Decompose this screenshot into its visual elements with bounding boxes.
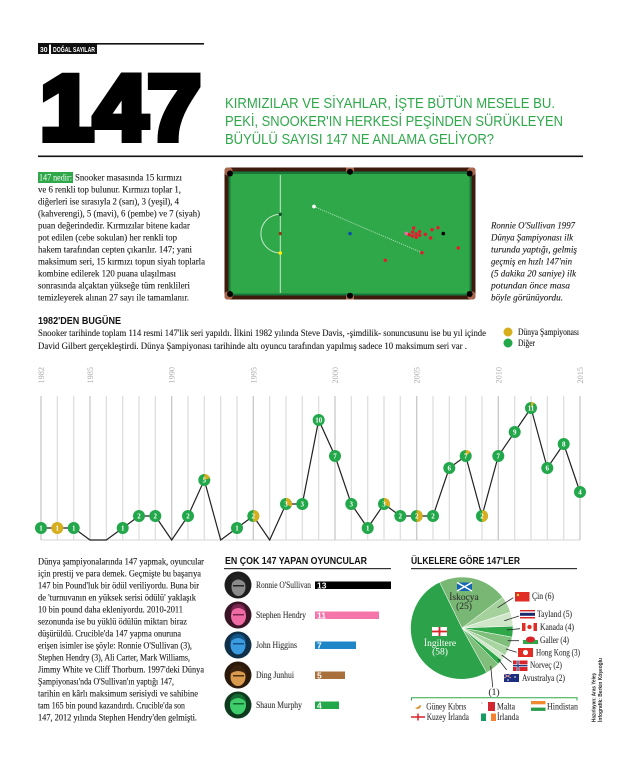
text block: prize money: için prestij ve para demek. Geçmişte bu başarıya: [38, 568, 201, 578]
player row: Ronnie O'Sullivan: [224, 572, 391, 598]
country label: Norway: Norveç (2): [530, 660, 562, 671]
country label: Thailand: Tayland (5): [537, 609, 572, 620]
text block: what is 147: kombine edilerek 120 puana ulaşılması: [38, 268, 176, 278]
pie label: Scotland: İskoçya: [449, 591, 480, 603]
snooker table diagram: [224, 168, 476, 300]
section tag: page number and section name: DOĞAL SAYILAR: [53, 45, 95, 54]
heading: green subtitle: PEKİ, SNOOKER'IN HERKESİ PEŞİNDEN SÜRÜKLEYEN: [225, 112, 563, 130]
text block: chart intro: Snooker tarihinde toplam 114 resmi 147'lik seri yapıldı. İlkini 1982 yılında Steve Davis, -şimdilik- sonuncusunu ise bu yıl içinde: [38, 328, 486, 338]
country label: Thailand: [520, 609, 572, 620]
player row: Stephen Hendry: Stephen Hendry: [256, 611, 306, 621]
line chart: 147s per year 1982-2015: 4: [578, 488, 582, 496]
text block: chart intro: [38, 328, 486, 351]
line chart: 147s per year 1982-2015: 2: [431, 512, 435, 520]
section tag: page number and section name: 30: [40, 45, 48, 54]
text block: what is 147: hakem tarafından cepten çıkarılır. 147; yani: [38, 244, 192, 254]
player row: John Higgins: John Higgins: [256, 641, 297, 651]
text block: prize money: Jimmy White ve Cliff Thorburn. 1997'deki Dünya: [38, 664, 204, 674]
line chart: 147s per year 1982-2015: 1985: [86, 367, 95, 384]
text block: prize money: sezonunda ise bu yüklü ödülün miktarı biraz: [38, 616, 187, 626]
line chart: 147s per year 1982-2015: 8: [562, 440, 566, 448]
player row: Stephen Hendry: 11: [317, 610, 326, 620]
line chart: 147s per year 1982-2015: 6: [448, 464, 452, 472]
text block: prize money: [38, 556, 204, 722]
bracket and legend: single-count countries: Kuzey İrlanda: [427, 711, 470, 723]
text block: prize money: 10 bin pound daha ekleniyordu. 2010-2011: [38, 604, 183, 614]
country label: Canada: [522, 622, 574, 633]
text block: what is 147: [38, 172, 205, 302]
section tag: page number and section name: [38, 43, 204, 54]
line chart: 147s per year 1982-2015: 7: [333, 452, 337, 460]
player row: Ding Junhui: 5: [317, 670, 322, 680]
country label: Wales: [523, 635, 569, 646]
text block: what is 147: diğerleri ise sırasıyla 2 (sarı), 3 (yeşil), 4: [38, 196, 179, 206]
heading: green subtitle: BÜYÜLÜ SAYISI 147 NE ANLAMA GELİYOR?: [225, 130, 494, 148]
caption: table description: Ronnie O'Sullivan 1997: [490, 220, 575, 230]
caption: table description: [490, 220, 577, 302]
player row: Ronnie O'Sullivan: Ronnie O'Sullivan: [256, 581, 311, 591]
country label: Australia: [504, 673, 565, 684]
line chart: 147s per year 1982-2015: 1982: [37, 367, 46, 384]
line chart: 147s per year 1982-2015: 7: [464, 452, 468, 460]
text block: prize money: Şampiyonası'nda O'Sullivan'ın yaptığı 147,: [38, 676, 174, 686]
line chart: 147s per year 1982-2015: 1990: [168, 367, 177, 384]
player row: Shaun Murphy: 4: [317, 700, 322, 710]
player row: Stephen Hendry: [224, 602, 379, 628]
text block: what is 147: pot edilen (cebe sokulan) her renkli top: [38, 232, 177, 242]
line chart: 147s per year 1982-2015: 9: [513, 428, 517, 436]
bracket and legend: single-count countries: Malta: [497, 702, 516, 712]
line chart: 147s per year 1982-2015: 3: [382, 500, 386, 508]
country label: Canada: Kanada (4): [540, 622, 574, 633]
text block: prize money: de 'turnuvanın en yüksek serisi ödülü' yaklaşık: [38, 592, 196, 602]
line chart: 147s per year 1982-2015: 1: [56, 524, 60, 532]
pie label: Scotland: (25): [456, 601, 472, 612]
text block: prize money: 147 bin Pound'luk bir ödül veriliyordu. Buna bir: [38, 580, 199, 590]
credits: rotated: [592, 658, 604, 722]
line chart: 147s per year 1982-2015: 2: [252, 512, 256, 520]
text block: prize money: tam 165 bin pound kazandırdı. Crucible'da son: [38, 700, 185, 710]
country label: China: [515, 591, 554, 602]
line chart: 147s per year 1982-2015: 2010: [494, 367, 503, 384]
text block: prize money: tarihin en kârlı maksimum serisiydi ve sahibine: [38, 688, 198, 698]
title: big number 147: 147: [40, 58, 201, 160]
line chart: 147s per year 1982-2015: 1: [366, 524, 370, 532]
caption: table description: potundan önce masa: [490, 280, 570, 290]
pie label: England: [424, 627, 456, 658]
line chart: 147s per year 1982-2015: 3: [301, 500, 305, 508]
line chart: 147s per year 1982-2015: 2005: [413, 367, 422, 384]
line chart: 147s per year 1982-2015: 11: [528, 404, 535, 412]
caption: table description: Dünya Şampiyonası ilk: [490, 232, 574, 242]
heading: since 1982: 1982'DEN BUGÜNE: [38, 314, 121, 327]
line chart: 147s per year 1982-2015: 2: [415, 512, 419, 520]
bracket and legend: single-count countries: İrlanda: [497, 711, 520, 723]
caption: table description: turunda yaptığı, gelmiş: [491, 244, 577, 254]
text block: prize money: Dünya şampiyonalarında 147 yapmak, oyuncular: [38, 556, 204, 566]
text block: what is 147: sonrasında alçaktan yükseğe tüm renklileri: [38, 280, 190, 290]
player row: Shaun Murphy: Shaun Murphy: [256, 701, 302, 711]
caption: table description: (5 dakika 20 saniye) ilk: [491, 268, 577, 278]
line chart: 147s per year 1982-2015: 1: [72, 524, 76, 532]
line chart: 147s per year 1982-2015: 2000: [331, 367, 340, 384]
pie chart: 147s by country: [411, 577, 513, 679]
pie label: England: (58): [432, 646, 448, 658]
legend: chart: Dünya Şampiyonası: [518, 327, 579, 337]
line chart: 147s per year 1982-2015: 1995: [249, 367, 258, 384]
pie label: Scotland: [449, 582, 480, 612]
heading: top players: EN ÇOK 147 YAPAN OYUNCULAR: [225, 555, 367, 567]
player row: Ding Junhui: Ding Junhui: [256, 671, 294, 681]
line chart: 147s per year 1982-2015: 2: [480, 512, 484, 520]
line chart: 147s per year 1982-2015: 7: [497, 452, 501, 460]
player row: Ronnie O'Sullivan: 13: [317, 580, 327, 590]
bracket and legend: single-count countries: Hindistan: [547, 702, 578, 712]
line chart: 147s per year 1982-2015: 1: [235, 524, 239, 532]
country label: single-count group: (1): [488, 687, 500, 698]
player row: Shaun Murphy: [224, 692, 339, 718]
heading: green subtitle: [225, 94, 563, 148]
country label: Wales: Galler (4): [540, 635, 569, 646]
country label: Hong Kong: [518, 648, 580, 658]
line chart: 147s per year 1982-2015: 1: [39, 524, 43, 532]
text block: what is 147: temizleyerek alınan 27 sayı ile tamamlanır.: [38, 292, 189, 302]
legend: chart: [504, 327, 579, 348]
text block: what is 147: 147 nedir:: [39, 172, 72, 182]
text block: what is 147: (kahverengi), 5 (mavi), 6 (pembe) ve 7 (siyah): [38, 208, 200, 218]
line chart: 147s per year 1982-2015: 2: [399, 512, 403, 520]
player row: John Higgins: [224, 632, 356, 658]
caption: table description: böyle görünüyordu.: [491, 292, 563, 302]
text block: chart intro: David Gilbert gerçekleştirdi. Dünya Şampiyonası tarihinde altı oyuncu tarafından yapılmış sadece 10 maksimum seri var .: [38, 341, 467, 351]
line chart: 147s per year 1982-2015: [35, 367, 586, 540]
text block: prize money: 147, 2012 yılında Stephen Hendry'den gelmişti.: [38, 712, 197, 722]
line chart: 147s per year 1982-2015: 6: [546, 464, 550, 472]
line chart: 147s per year 1982-2015: 2: [186, 512, 190, 520]
line chart: 147s per year 1982-2015: 3: [284, 500, 288, 508]
country label: Hong Kong: Hong Kong (3): [536, 648, 580, 658]
text block: what is 147: maksimum seri, 15 kırmızı topun siyah toplarla: [38, 256, 205, 266]
heading: green subtitle: KIRMIZILAR VE SİYAHLAR, İŞTE BÜTÜN MESELE BU.: [225, 94, 555, 112]
player row: Ding Junhui: [224, 662, 345, 688]
bracket and legend: single-count countries: Güney Kıbrıs: [426, 702, 467, 712]
text block: what is 147: Snooker masasında 15 kırmızı: [75, 172, 182, 182]
text block: prize money: erişen isimler ise şöyle: Ronnie O'Sullivan (3),: [38, 640, 192, 650]
player row: John Higgins: 7: [317, 640, 322, 650]
legend: chart: Diğer: [518, 338, 535, 348]
pie label: England: İngiltere: [424, 637, 456, 649]
text block: what is 147: puan değerindedir. Kırmızılar bitene kadar: [38, 220, 190, 230]
text block: prize money: düşürüldü. Crucible'da 147 yapma onuruna: [38, 628, 181, 638]
heading: by country: ÜLKELERE GÖRE 147'LER: [411, 554, 520, 567]
line chart: 147s per year 1982-2015: 3: [350, 500, 354, 508]
credits: rotated: Hazırlayan: Aras Yeleş: [592, 673, 598, 722]
country label: Australia: Avustralya (2): [522, 673, 565, 684]
panel: top players bar chart: [224, 572, 391, 718]
credits: rotated: İnfografik: Berkin Köşeoğlu: [597, 658, 604, 722]
bracket and legend: single-count countries: [411, 698, 578, 723]
text block: what is 147: ve 6 renkli top bulunur. Kırmızı toplar 1,: [38, 184, 181, 194]
line chart: 147s per year 1982-2015: 1: [121, 524, 125, 532]
leader lines: pie labels: [491, 598, 520, 687]
country label: Norway: [513, 660, 562, 671]
line chart: 147s per year 1982-2015: 10: [315, 416, 323, 424]
text block: prize money: Stephen Hendry (3), Ali Carter, Mark Williams,: [38, 652, 190, 662]
line chart: 147s per year 1982-2015: 2: [137, 512, 141, 520]
line chart: 147s per year 1982-2015: 5: [203, 476, 207, 484]
caption: table description: geçmiş en hızlı 147'nin: [491, 256, 572, 266]
country label: China: Çin (6): [532, 591, 554, 602]
line chart: 147s per year 1982-2015: 2015: [576, 367, 585, 384]
line chart: 147s per year 1982-2015: 2: [154, 512, 158, 520]
